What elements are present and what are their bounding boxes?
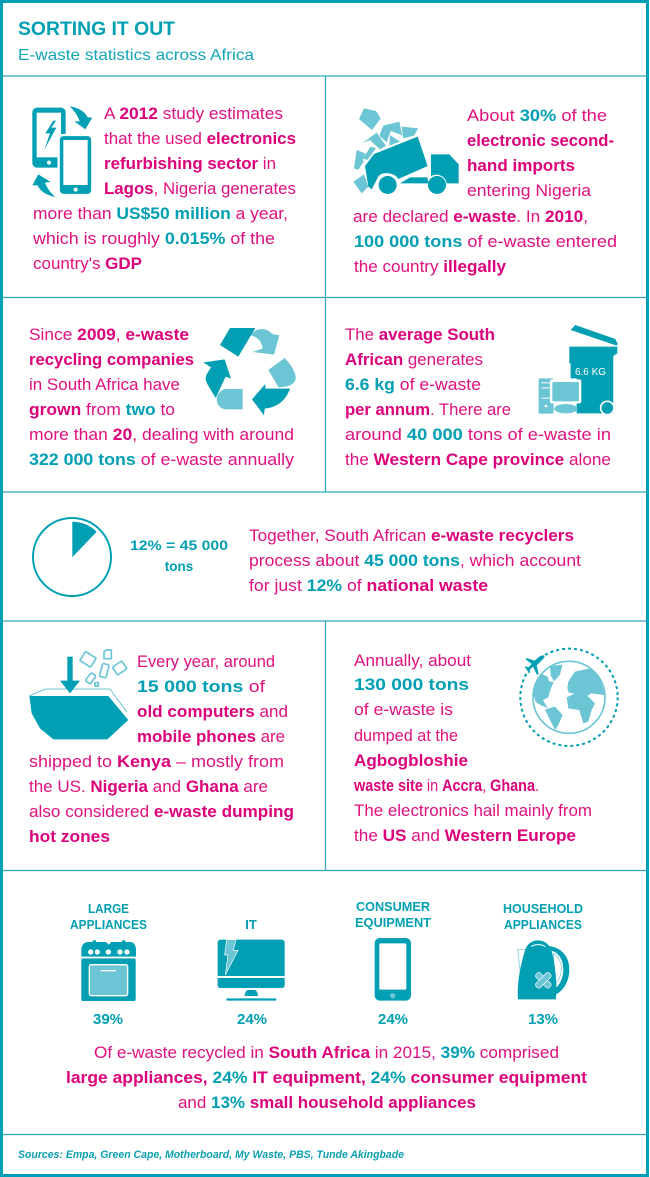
text: Nigeria imports: the country illegally	[354, 257, 507, 276]
panel: Kenya dumping	[29, 650, 294, 846]
text: Lagos study: Lagos, Nigeria generates	[104, 179, 296, 198]
panel: Lagos refurbishing	[32, 104, 296, 273]
text: Kenya dumping: mobile phones are	[137, 727, 285, 746]
panel: Nigeria imports	[353, 106, 617, 276]
text: recycling companies	[29, 325, 295, 469]
text: national waste: Together, South African e-waste recyclers	[249, 526, 574, 545]
text: recycling companies: 322 000 tons of e-waste annually	[29, 450, 295, 469]
text: Agbogbloshie: 130 000 tons	[354, 675, 469, 694]
text: average South African: per annum. There are	[345, 400, 511, 419]
text: national waste	[249, 526, 581, 595]
icon: smartphone	[375, 938, 411, 1001]
column: consumer equipment: 24%	[378, 1011, 408, 1028]
text: Kenya dumping: also considered e-waste dumping	[29, 802, 294, 821]
column: large appliances	[70, 901, 147, 1028]
text: average South African: The average South	[345, 325, 495, 344]
column: household appliances	[503, 901, 583, 1028]
text: Nigeria imports: About 30% of the	[467, 106, 607, 125]
column: consumer equipment: CONSUMER	[356, 899, 431, 914]
text: Lagos study: that the used electronics	[104, 129, 296, 148]
panel: 12 percent	[33, 518, 581, 596]
sources: Sources: Empa, Green Cape, Motherboard, My Waste, PBS, Tunde Akingbade	[18, 1149, 404, 1161]
column: household appliances: APPLIANCES	[504, 917, 582, 932]
icon: recycling arrows	[203, 328, 296, 415]
column: IT: 24%	[237, 1011, 267, 1028]
column: IT: IT	[245, 917, 257, 932]
text: Lagos study	[32, 104, 296, 273]
text: recycling companies: recycling companies	[29, 350, 194, 369]
text: Kenya dumping: the US. Nigeria and Ghana are	[29, 777, 268, 796]
text: national waste: for just 12% of national waste	[249, 576, 488, 595]
text: Kenya dumping: Every year, around	[137, 652, 275, 671]
text: average South African: around 40 000 tons of e-waste in	[345, 425, 611, 444]
column: large appliances: LARGE	[88, 901, 129, 916]
text: recycling companies: grown from two to	[29, 400, 175, 419]
title: SORTING IT OUT	[18, 19, 175, 40]
text: Nigeria imports: entering Nigeria	[467, 181, 592, 200]
text: Agbogbloshie	[353, 651, 592, 845]
text: Agbogbloshie: dumped at the	[354, 726, 458, 745]
column: large appliances: APPLIANCES	[70, 917, 147, 932]
panel: Agbogbloshie	[353, 649, 618, 845]
icon: oven	[81, 940, 136, 1001]
text: 2015 summary: large appliances, 24% IT equipment, 24% consumer equipment	[66, 1068, 587, 1087]
title block	[18, 19, 254, 64]
icon: dump truck	[353, 108, 459, 194]
pie chart: 12%	[33, 518, 111, 596]
text: recycling companies: Since 2009, e-waste	[29, 325, 189, 344]
panel: average South African	[345, 325, 618, 469]
text: Agbogbloshie: waste site in Accra, Ghana.	[353, 776, 539, 795]
text: Agbogbloshie: Annually, about	[354, 651, 471, 670]
text: Kenya dumping: old computers and	[137, 702, 288, 721]
text: Agbogbloshie: of e-waste is	[354, 700, 453, 719]
pie label: 12% = 45 000	[130, 538, 228, 553]
column: consumer equipment: EQUIPMENT	[355, 915, 431, 930]
text: average South African: the Western Cape province alone	[345, 450, 611, 469]
text: Nigeria imports: electronic second-	[467, 131, 614, 150]
text: Nigeria imports: are declared e-waste. In 2010,	[353, 207, 588, 226]
text: Lagos study: refurbishing sector in	[104, 154, 276, 173]
text: Nigeria imports	[353, 106, 617, 276]
column: IT	[218, 917, 285, 1028]
pie label	[130, 538, 228, 574]
icon: wheelie bin and computer	[539, 325, 618, 415]
text: 2015 summary: and 13% small household appliances	[178, 1093, 476, 1112]
text: recycling companies: in South Africa have	[29, 375, 180, 394]
icon: globe and plane	[520, 649, 618, 746]
text: Agbogbloshie: Agbogbloshie	[354, 751, 468, 770]
label: 6.6 KG: 6.6 KG	[575, 366, 606, 378]
panel: South Africa recycling companies	[29, 325, 296, 469]
icon: monitor	[218, 940, 285, 1001]
text: Lagos study: more than US$50 million a year,	[33, 204, 288, 223]
text: Lagos study: which is roughly 0.015% of the	[32, 229, 275, 248]
column: large appliances: 39%	[93, 1011, 123, 1028]
text: average South African	[345, 325, 611, 469]
text: Kenya dumping: shipped to Kenya – mostly from	[29, 752, 284, 771]
text: Lagos study: country's GDP	[33, 254, 142, 273]
text: Kenya dumping: hot zones	[29, 827, 110, 846]
text: average South African: African generates	[345, 350, 483, 369]
subtitle: E-waste statistics across Africa	[18, 47, 254, 64]
text: Kenya dumping: 15 000 tons of	[137, 677, 265, 696]
text: average South African: 6.6 kg of e-waste	[345, 375, 481, 394]
text: national waste: process about 45 000 tons, which account	[249, 551, 581, 570]
panel: South Africa 2015 breakdown	[66, 899, 587, 1112]
text: Lagos study: A 2012 study estimates	[104, 104, 283, 123]
column: household appliances: HOUSEHOLD	[503, 901, 583, 916]
text: Nigeria imports: 100 000 tons of e-waste entered	[354, 232, 617, 251]
icon: skip with devices	[29, 650, 128, 739]
icon: kettle	[518, 940, 569, 999]
text: 2015 summary	[66, 1043, 587, 1112]
text: Agbogbloshie: the US and Western Europe	[354, 826, 576, 845]
text: 2015 summary: Of e-waste recycled in South Africa in 2015, 39% comprised	[94, 1043, 559, 1062]
text: Agbogbloshie: The electronics hail mainly from	[354, 801, 592, 820]
pie label: tons	[165, 559, 193, 574]
text: Kenya dumping	[29, 652, 294, 846]
icon: phones with arrows	[32, 106, 92, 197]
text: Nigeria imports: hand imports	[467, 156, 575, 175]
column: household appliances: 13%	[528, 1011, 558, 1028]
column: consumer equipment	[355, 899, 431, 1028]
text: recycling companies: more than 20, dealing with around	[29, 425, 294, 444]
